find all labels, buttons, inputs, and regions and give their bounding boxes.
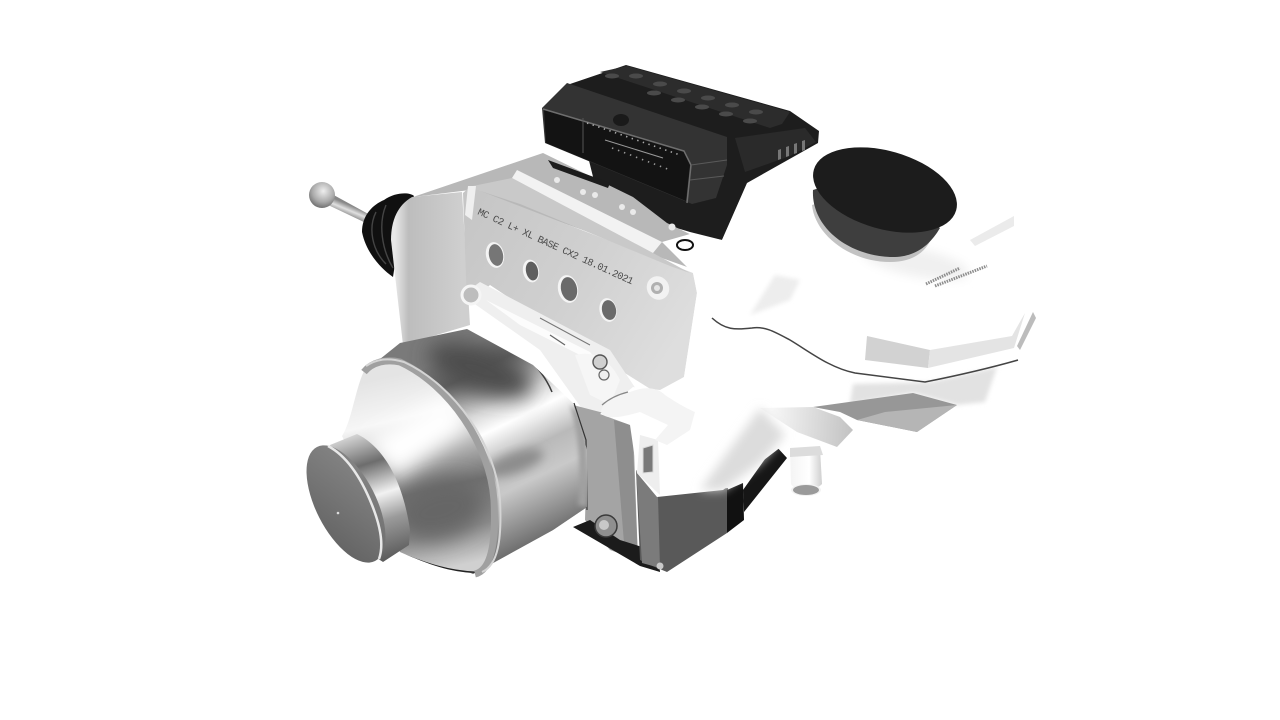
product illustration: brake booster unit	[306, 65, 1036, 578]
motor end cap cylinder	[330, 434, 410, 562]
connector front hood	[542, 83, 727, 204]
motor end cone	[342, 364, 491, 573]
reservoir lid facets	[750, 216, 1036, 368]
silver top deck	[413, 153, 702, 268]
electric motor housing	[380, 329, 587, 574]
filler cap	[803, 132, 967, 262]
engraved part code: MC C2 L+ XL BASE CX2 18.01.2021	[475, 208, 635, 288]
connector rear housing	[570, 65, 819, 240]
valve block side plate	[573, 403, 660, 572]
clip hook and screw ear	[601, 388, 695, 473]
motor end cap face	[290, 433, 402, 575]
deck slot under connector	[548, 160, 610, 188]
plate bolt	[642, 272, 674, 304]
front plate	[463, 170, 697, 395]
brake fluid reservoir body	[600, 160, 1036, 497]
motor rim	[364, 361, 494, 574]
reservoir drain spout	[790, 446, 823, 496]
manifold casting behind motor	[462, 282, 640, 425]
left mounting bracket	[391, 192, 470, 345]
black rubber boot	[362, 193, 414, 277]
reservoir boss with screw	[677, 240, 693, 250]
motor rim highlight	[366, 359, 500, 572]
deck screws	[554, 177, 676, 230]
reservoir lid seam	[712, 318, 1018, 382]
push rod with ball end	[309, 182, 372, 223]
plate holes	[483, 240, 619, 324]
reservoir label marking	[926, 266, 987, 286]
lower electronics block	[636, 445, 787, 572]
